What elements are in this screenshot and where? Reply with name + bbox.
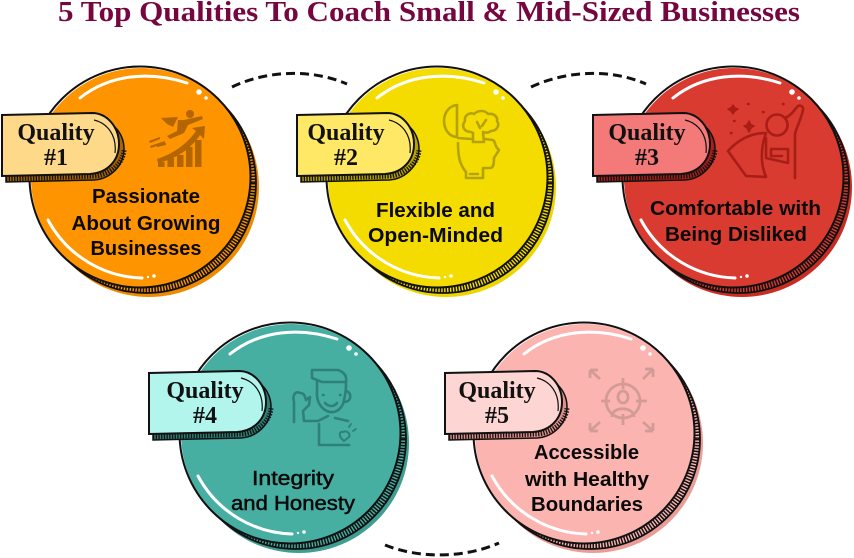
icon: hero with cape and stars xyxy=(728,104,803,178)
text: passionate: Passionate xyxy=(92,186,200,208)
label tag 1: Quality xyxy=(17,120,95,146)
arrow: connector quality 4 to 5 xyxy=(385,543,499,555)
label tag 3: Quality xyxy=(608,120,686,146)
panel: quality 2 xyxy=(297,66,556,297)
text: accessible: Boundaries xyxy=(531,494,643,516)
icon: waving person with heart xyxy=(293,370,356,445)
text: passionate: Businesses xyxy=(90,238,202,260)
arrow: connector quality 2 to 3 xyxy=(531,73,646,87)
panel: quality 5 xyxy=(445,322,703,553)
text: comfortable: Being Disliked xyxy=(665,224,807,246)
coin 5 xyxy=(474,322,703,553)
label tag 3: #3 xyxy=(635,145,659,171)
coin 1 xyxy=(30,66,259,297)
label tag 2 xyxy=(297,113,419,182)
label tag 4: #4 xyxy=(193,403,217,429)
panel: quality 4 xyxy=(149,322,409,553)
label tag 1: #1 xyxy=(44,145,68,171)
text: accessible: with Healthy xyxy=(524,469,650,491)
label tag 5: #5 xyxy=(485,403,509,429)
text: flexible: Open-Minded xyxy=(368,225,503,247)
coin 4 xyxy=(180,322,409,553)
arrow: connector quality 1 to 2 xyxy=(232,73,347,87)
text: accessible: Accessible xyxy=(534,442,639,464)
coin 2 xyxy=(326,66,556,297)
label tag 5 xyxy=(445,371,567,440)
label tag 4 xyxy=(149,371,271,440)
text: flexible: Flexible and xyxy=(376,200,495,222)
label tag 1 xyxy=(2,113,124,182)
icon: flying hero over rising bars xyxy=(149,110,205,167)
icon: open mind brain xyxy=(444,105,499,178)
label tag 5: Quality xyxy=(458,378,536,404)
text: comfortable: Comfortable with xyxy=(650,198,821,220)
text: integrity: Integrity xyxy=(252,468,334,490)
label tag 4: Quality xyxy=(166,378,244,404)
panel: quality 1 xyxy=(2,66,259,297)
label tag 2: Quality xyxy=(307,120,385,146)
text: passionate: About Growing xyxy=(72,213,220,235)
icon: target person with arrows xyxy=(590,369,653,431)
panel: quality 3 xyxy=(593,66,852,297)
label tag 3 xyxy=(593,113,715,182)
label tag 2: #2 xyxy=(334,145,358,171)
text: integrity: and Honesty xyxy=(231,493,355,515)
coin 3 xyxy=(622,66,852,297)
